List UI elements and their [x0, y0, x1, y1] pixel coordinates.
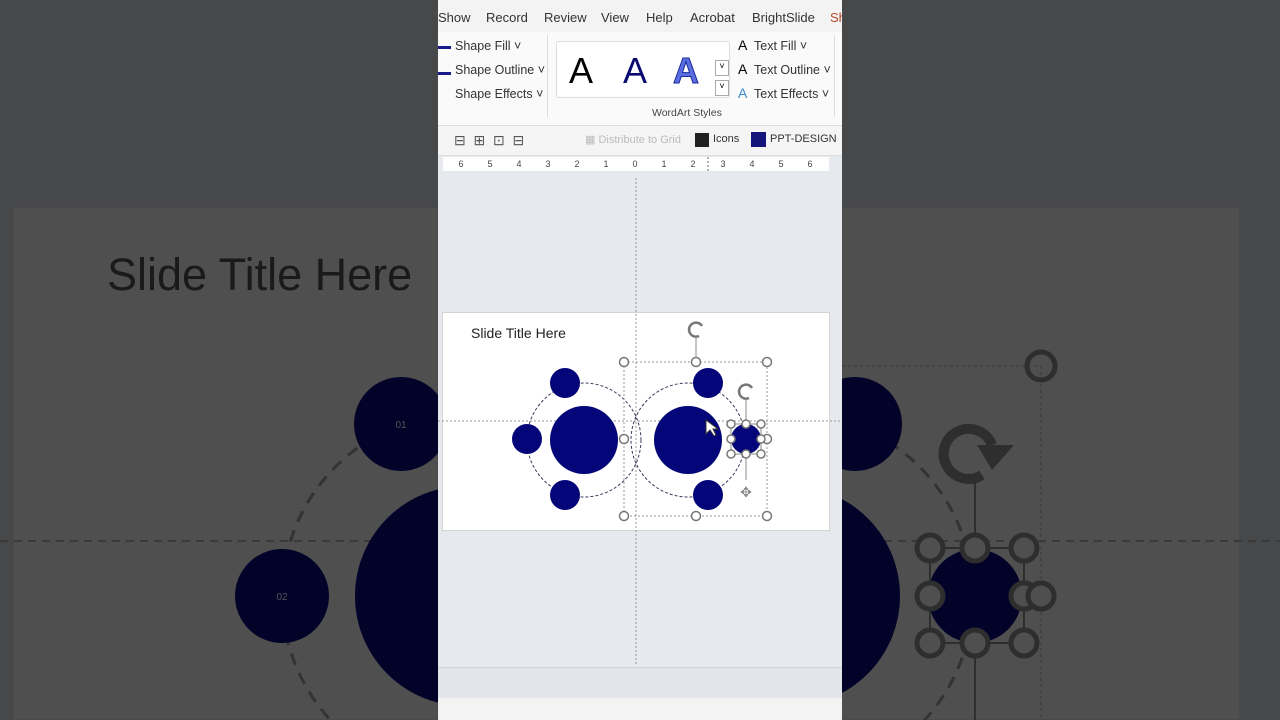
slide	[442, 312, 830, 531]
background blurred zoom: right	[842, 350, 1280, 720]
wordart gallery: A	[673, 50, 699, 91]
background blurred zoom: left: 01	[395, 420, 407, 431]
ribbon: Text Outline ˅	[754, 63, 831, 77]
ribbon: ˅	[719, 61, 725, 71]
ruler: 5	[487, 159, 493, 169]
guides and diagram: Slide Title Here	[471, 325, 566, 341]
ruler: 6	[807, 159, 813, 169]
ribbon: ˅	[719, 81, 725, 91]
tab bar: View	[601, 10, 629, 25]
app window	[438, 0, 842, 720]
ruler: 2	[574, 159, 580, 169]
ruler: 6	[458, 159, 464, 169]
wordart gallery: A	[569, 50, 593, 91]
tab bar: Review	[544, 10, 587, 25]
ribbon: Text Effects ˅	[754, 87, 829, 101]
bottom strips	[438, 667, 842, 699]
ribbon: Text Fill ˅	[754, 39, 807, 53]
guides and diagram	[438, 178, 840, 664]
ribbon: WordArt Styles	[652, 107, 722, 119]
wordart gallery: A	[623, 50, 647, 91]
ruler: 1	[661, 159, 667, 169]
toolbar: ⊟ ⊞ ⊡ ⊟	[454, 132, 524, 148]
ruler: 4	[516, 159, 522, 169]
ruler: 3	[720, 159, 726, 169]
tab bar: Help	[646, 10, 673, 25]
guides and diagram: ✥	[740, 484, 752, 500]
ruler: 5	[778, 159, 784, 169]
background blurred zoom: left	[0, 249, 438, 719]
ribbon: Shape Outline ˅	[455, 63, 545, 77]
ribbon: A	[738, 37, 747, 53]
tab bar: Record	[486, 10, 528, 25]
toolbar: Icons	[713, 133, 739, 145]
ruler: 4	[749, 159, 755, 169]
ruler: 0	[632, 159, 638, 169]
tab bar: Show	[438, 10, 471, 25]
ruler: 3	[545, 159, 551, 169]
ribbon	[438, 32, 842, 126]
wordart gallery	[556, 41, 730, 98]
tab bar: Acrobat	[690, 10, 735, 25]
ruler	[443, 157, 829, 171]
ribbon: A	[738, 61, 747, 77]
tab bar	[438, 0, 842, 32]
toolbar	[438, 126, 842, 156]
background blurred zoom: left: Slide Title Here	[107, 249, 412, 300]
ribbon: Shape Effects ˅	[455, 87, 543, 101]
tab bar: BrightSlide	[752, 10, 815, 25]
ruler: 1	[603, 159, 609, 169]
toolbar: ▦ Distribute to Grid	[585, 134, 681, 146]
background blurred zoom: left: 02	[276, 592, 288, 603]
ruler: 2	[690, 159, 696, 169]
ribbon: Shape Fill ˅	[455, 39, 521, 53]
ribbon: A	[738, 85, 747, 101]
toolbar: PPT-DESIGN	[770, 133, 837, 145]
